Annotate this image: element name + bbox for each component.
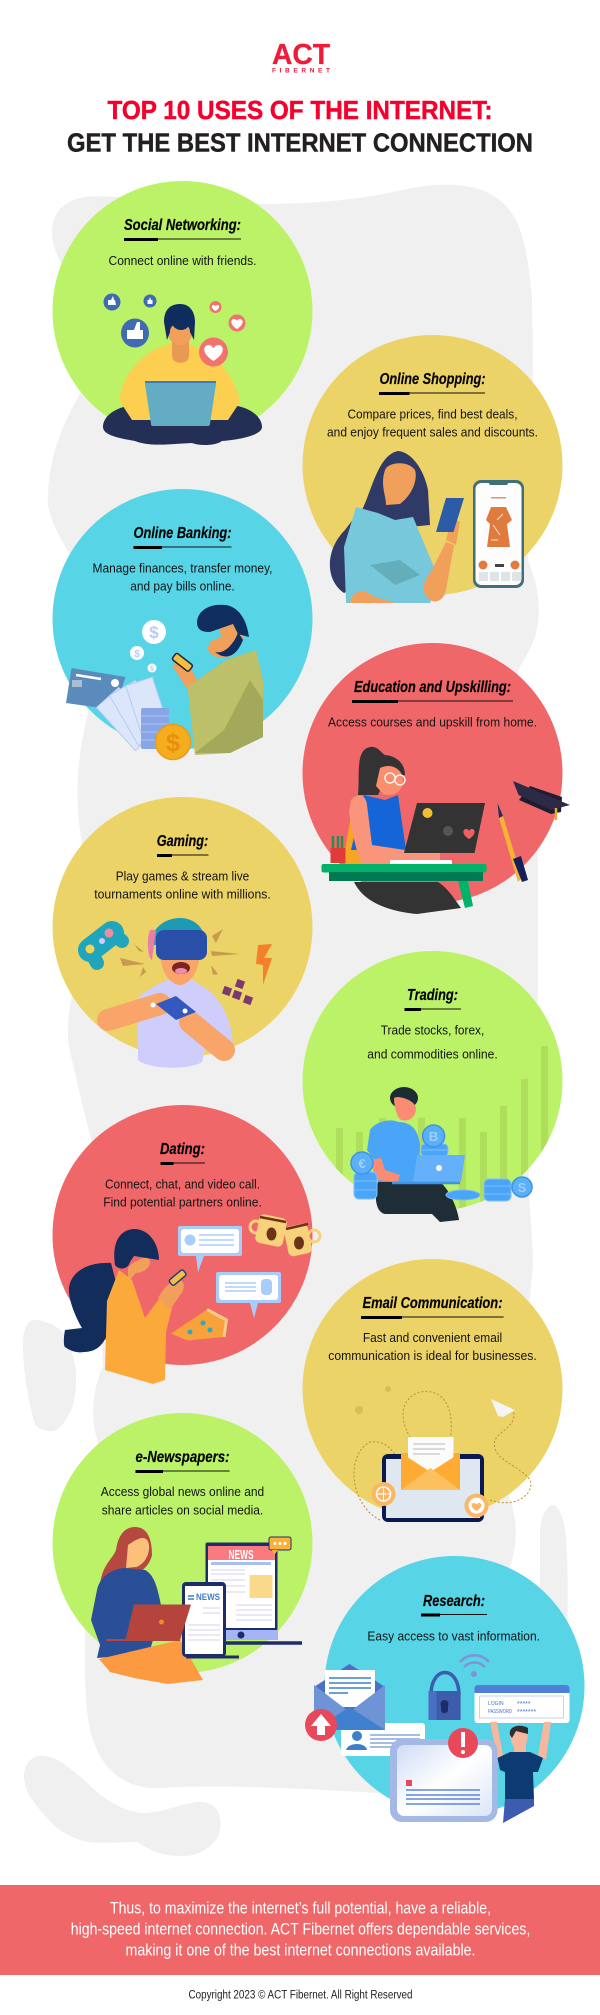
illustration: trader with laptop and coins: € — [358, 1156, 366, 1171]
icon: pen holder — [330, 836, 346, 863]
icon: wifi — [460, 1655, 489, 1676]
icon: pencil — [498, 803, 528, 882]
illustration: man on phone with money: $ — [166, 729, 180, 757]
heading: email communication: Email Communication: — [362, 1295, 502, 1312]
heading: dating: Dating: — [160, 1141, 205, 1158]
illustration: trader with laptop and coins: S — [518, 1180, 527, 1195]
heading: gaming: Gaming: — [157, 833, 208, 850]
panel: e-newspapers — [52, 1413, 312, 1684]
text: education and upskilling: Access courses and upskill from home. — [328, 714, 537, 730]
illustration: man on phone with money: $ — [149, 623, 159, 642]
icon: login card: ***** — [517, 1701, 531, 1708]
illustration: gamer with VR headset — [86, 918, 272, 1068]
icon: desktop news screen — [206, 1542, 302, 1643]
icon: login card: ******* — [517, 1709, 536, 1716]
icon: upload badge — [305, 1709, 337, 1741]
icon: chat bubble one — [178, 1226, 242, 1272]
man holding card — [490, 1722, 551, 1823]
logo: FIBERNET — [272, 68, 330, 74]
panel: online shopping — [302, 335, 562, 603]
icon: chat bubble two — [216, 1272, 281, 1318]
icon: globe badge — [372, 1482, 396, 1506]
panel: gaming — [52, 797, 312, 1068]
panel: gaming: tournaments online with millions. — [94, 886, 271, 902]
conclusion banner: making it one of the best internet connections available. — [126, 1942, 476, 1960]
illustration: woman shopping on phone — [330, 451, 524, 603]
heading: e-newspapers: e-Newspapers: — [136, 1449, 230, 1466]
icon: coffee mugs — [250, 1213, 320, 1257]
icon: padlock — [429, 1672, 461, 1720]
illustration: trader with laptop and coins — [351, 1087, 532, 1222]
text: social networking: Connect online with friends. — [108, 253, 256, 268]
text: e-newspapers: Access global news online and — [101, 1484, 264, 1499]
illustration: online security and information — [305, 1655, 570, 1823]
illustration: woman reading news — [91, 1527, 302, 1684]
panel: dating — [52, 1105, 320, 1384]
illustration: man on phone with money: $ — [150, 666, 154, 673]
icon: login card: PASSWORD — [488, 1709, 512, 1715]
icon: thumbs up — [104, 294, 156, 348]
icon: dollar coins — [130, 620, 166, 672]
icon: coin stacks — [354, 1144, 511, 1201]
illustration: person with laptop and reactions — [103, 294, 262, 445]
illustration: man on phone with money: $ — [134, 649, 140, 660]
text: email communication: Fast and convenient email — [363, 1330, 502, 1345]
panel: trading: and commodities online. — [367, 1046, 498, 1062]
icon: phone news — [182, 1582, 239, 1657]
panel: online shopping: and enjoy frequent sales and discounts. — [327, 424, 538, 440]
icon: banknotes — [96, 677, 170, 751]
icon: lightning — [256, 944, 272, 985]
desk — [322, 864, 486, 872]
icon: dice — [222, 979, 253, 1005]
icon: hearts — [199, 301, 246, 366]
icon: coin stack — [141, 708, 169, 749]
heading: education and upskilling: Education and Upskilling: — [354, 679, 511, 696]
chart: background bars — [336, 1046, 548, 1222]
icon: tablet — [390, 1739, 498, 1822]
icon: phone with dress — [473, 480, 524, 588]
text: online banking: Manage finances, transfer money, — [92, 560, 272, 576]
text: online shopping: Compare prices, find best deals, — [348, 406, 518, 422]
title: TOP 10 USES OF THE INTERNET: — [108, 95, 492, 125]
icon: login card: LOGIN — [488, 1701, 504, 1707]
panel: research — [305, 1556, 584, 1823]
background blobs — [23, 185, 568, 1856]
icon: chat badge — [269, 1537, 291, 1555]
icon: tablet in hand — [436, 498, 464, 532]
heading: online banking: Online Banking: — [134, 525, 232, 542]
panel: dating: Find potential partners online. — [103, 1194, 262, 1210]
panel: social networking — [52, 181, 312, 445]
illustration: woman studying at laptop — [322, 747, 570, 914]
icon: pizza slice — [171, 1310, 226, 1340]
icon: id card — [341, 1723, 425, 1756]
icon: laptop — [404, 803, 485, 853]
heading: online shopping: Online Shopping: — [380, 371, 486, 388]
icon: paper plane — [491, 1399, 515, 1417]
text: trading: Trade stocks, forex, — [381, 1022, 484, 1038]
icon: gold coin — [156, 724, 190, 760]
text: gaming: Play games & stream live — [116, 868, 249, 884]
panel: e-newspapers: share articles on social media. — [102, 1502, 263, 1518]
panel: education and upskilling — [302, 643, 570, 914]
icon: phone news: NEWS — [196, 1592, 220, 1603]
icon: VR headset — [156, 930, 207, 960]
illustration: trader with laptop and coins: B — [429, 1129, 438, 1144]
icon: heart badge — [464, 1494, 488, 1518]
title: GET THE BEST INTERNET CONNECTION — [67, 128, 533, 158]
dashed paths — [354, 1392, 531, 1520]
panel: trading — [302, 951, 562, 1222]
icon: alert badge — [448, 1728, 478, 1758]
panel: email communication — [302, 1259, 562, 1522]
text: research: Easy access to vast information. — [367, 1628, 540, 1644]
illustration: woman chatting on phone — [64, 1213, 320, 1384]
illustration: man on phone with money — [66, 605, 263, 760]
logo: ACT — [272, 39, 330, 71]
icon: envelope — [401, 1437, 460, 1490]
text: dating: Connect, chat, and video call. — [105, 1176, 260, 1192]
icon: graduation cap — [513, 781, 570, 820]
icon: laptop — [106, 1604, 191, 1640]
illustration: email on tablet — [354, 1386, 531, 1522]
icon: sparks — [120, 929, 240, 977]
icon: tablet — [382, 1454, 484, 1522]
icon: login card — [474, 1685, 570, 1723]
copyright: Copyright 2023 © ACT Fibernet. All Right Reserved — [188, 1990, 412, 2002]
heading: social networking: Social Networking: — [124, 217, 241, 234]
conclusion banner — [0, 1885, 600, 1975]
title — [67, 95, 533, 158]
icon: laptop — [413, 1155, 465, 1182]
icon: envelope — [314, 1664, 385, 1730]
icon: game controller — [86, 928, 122, 963]
heading: research: Research: — [423, 1593, 485, 1610]
panel: online banking: and pay bills online. — [130, 578, 235, 594]
heading: trading: Trading: — [407, 987, 458, 1004]
icon: credit card — [66, 668, 126, 710]
conclusion banner: high-speed internet connection. ACT Fibernet offers dependable services, — [71, 1920, 530, 1938]
conclusion banner: Thus, to maximize the internet’s full potential, have a reliable, — [110, 1900, 491, 1918]
panel: email communication: communication is ideal for businesses. — [328, 1348, 537, 1363]
icon: desktop news screen: NEWS — [228, 1548, 254, 1562]
panel: online banking — [52, 489, 312, 760]
